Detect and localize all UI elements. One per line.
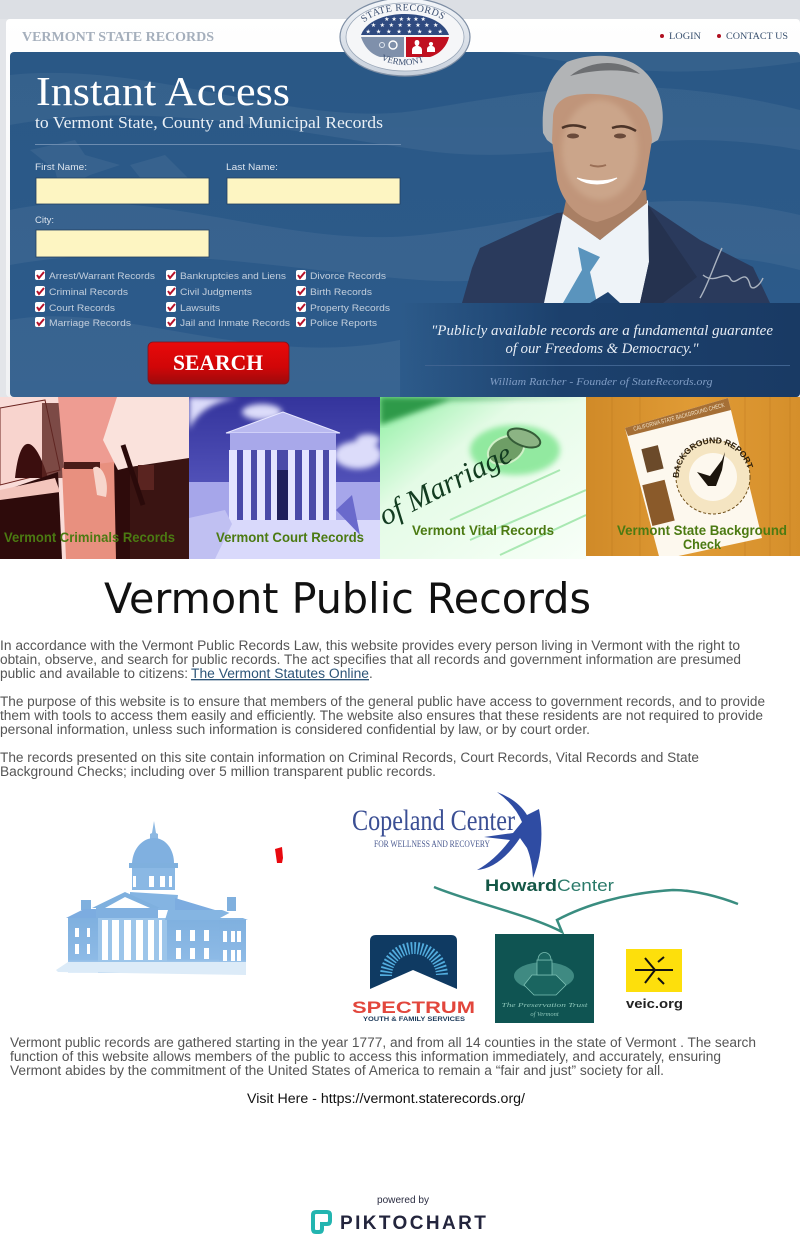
record type checkboxes: Divorce Records — [310, 271, 386, 282]
site name: VERMONT STATE RECORDS — [22, 29, 214, 44]
records paragraph: The records presented on this site contain information on Criminal Records, Court Records, Vital Records and State — [0, 750, 699, 765]
heading: Instant Access: Instant Access — [36, 68, 290, 114]
photo: background check: CALIFORNIA STATE BACKGROUND CHECK — [633, 403, 725, 433]
header links: CONTACT US — [726, 32, 788, 42]
intro paragraph: public and available to citizens: — [0, 666, 188, 681]
state records seal: ★ ★ ★ ★ ★ ★ ★ ★ — [371, 22, 439, 29]
photo: vital records — [373, 397, 586, 559]
face — [552, 94, 652, 222]
header links: LOGIN — [669, 32, 701, 42]
shirt — [544, 200, 649, 303]
state records seal: STATE RECORDS — [361, 4, 445, 22]
intro paragraph: The Vermont Statutes Online — [191, 666, 369, 681]
logo: Spectrum — [352, 935, 475, 1023]
logo: Preservation Trust — [495, 934, 594, 1023]
quote panel — [400, 292, 800, 397]
logo: VEIC — [626, 949, 683, 1011]
record type checkboxes: Marriage Records — [49, 318, 131, 329]
records paragraph — [0, 750, 699, 779]
search form fields: First Name: — [35, 162, 87, 173]
title: Vermont Public Records — [104, 574, 591, 623]
logo: Howard Center: Center — [557, 876, 614, 895]
closing paragraph — [10, 1035, 756, 1078]
intro paragraph: obtain, observe, and search for public records. The act specifies that all records and government information are presumed — [0, 652, 741, 667]
heading: Instant Access: to Vermont State, County and Municipal Records — [35, 113, 383, 132]
record type checkboxes: Bankruptcies and Liens — [180, 271, 286, 282]
photo: background check: BACKGROUND REPORT — [672, 437, 754, 478]
records paragraph: Background Checks; including over 5 million transparent public records. — [0, 764, 436, 779]
logo: Preservation Trust: of Vermont — [530, 1011, 559, 1018]
icon: capitol building — [56, 821, 248, 975]
intro paragraph: . — [369, 666, 373, 681]
purpose paragraph: personal information, unless such information is considered confidential by law, or by court order. — [0, 722, 590, 737]
Piktochart footer: PIKTOCHART — [340, 1213, 488, 1234]
logo: Spectrum: YOUTH & FAMILY SERVICES — [363, 1016, 466, 1023]
logo: Howard Center: Howard — [485, 876, 557, 895]
search button — [148, 342, 289, 384]
closing paragraph: Vermont abides by the commitment of the United States of America to remain a “fair and just” society for all. — [10, 1063, 664, 1078]
portrait of founder — [462, 56, 770, 303]
search button: SEARCH — [173, 350, 263, 375]
closing paragraph: function of this website allows members of the public to access this information immediately, and accurately, ensuring — [10, 1049, 721, 1064]
record type checkboxes: Birth Records — [310, 287, 372, 298]
intro paragraph: In accordance with the Vermont Public Records Law, this website provides every person living in Vermont with the right to — [0, 638, 740, 653]
hero panel — [10, 52, 800, 397]
purpose paragraph: The purpose of this website is to ensure that members of the general public have access to government records, and to provide — [0, 694, 765, 709]
record type checkboxes: Civil Judgments — [180, 287, 252, 298]
record type checkboxes: Police Reports — [310, 318, 377, 329]
photo: background check: Check — [683, 536, 721, 552]
quote panel: "Publicly available records are a fundamental guarantee — [431, 323, 774, 339]
logo: Preservation Trust: The Preservation Trust — [502, 1002, 588, 1009]
label: Vermont State Background — [617, 522, 787, 538]
photo: court records — [189, 397, 382, 559]
record type checkboxes: Arrest/Warrant Records — [49, 271, 155, 282]
search form fields — [35, 162, 400, 257]
record type checkboxes: Jail and Inmate Records — [180, 318, 290, 329]
closing paragraph: Vermont public records are gathered starting in the year 1777, and from all 14 counties in the state of Vermont . The search — [10, 1035, 756, 1050]
Piktochart footer: powered by — [377, 1195, 429, 1206]
right lapel — [640, 205, 697, 303]
record type checkboxes: Lawsuits — [180, 303, 220, 314]
Piktochart footer — [313, 1195, 488, 1234]
logo: Copeland Center: Copeland Center — [352, 804, 515, 837]
state records seal — [339, 0, 471, 77]
header links — [660, 32, 788, 42]
purpose paragraph — [0, 694, 765, 737]
search form fields: Last Name: — [226, 162, 278, 173]
logo: Copeland Center: FOR WELLNESS AND RECOVERY — [374, 839, 490, 849]
record type checkboxes: Criminal Records — [49, 287, 128, 298]
logo: VEIC: veic.org — [626, 996, 683, 1011]
record type checkboxes: Court Records — [49, 303, 115, 314]
label: Vermont Court Records — [216, 529, 364, 545]
flag wave background — [10, 52, 800, 397]
visit link: Visit Here - https://vermont.staterecords.org/ — [247, 1091, 525, 1106]
record type checkboxes — [35, 270, 390, 329]
quote panel: of our Freedoms & Democracy." — [506, 341, 699, 357]
search form fields: City: — [35, 215, 54, 226]
eyes, nose and mouth — [562, 125, 586, 128]
record type checkboxes: Property Records — [310, 303, 390, 314]
state records seal: ★ ★ ★ ★ ★ ★ — [384, 16, 426, 23]
label: Vermont Vital Records — [412, 522, 554, 538]
logo: Spectrum: SPECTRUM — [352, 998, 475, 1017]
logo: Howard Center — [434, 876, 738, 932]
page header band — [0, 0, 800, 397]
purpose paragraph: them with tools to access them easily and efficiently. The website also ensures that these residents are not required to provide — [0, 708, 763, 723]
photo: background check — [586, 397, 800, 556]
photo: criminal records — [0, 397, 189, 559]
hair — [543, 56, 663, 150]
tie — [563, 247, 600, 303]
intro paragraph — [0, 638, 741, 681]
logo: Copeland Center — [352, 792, 541, 878]
photo: vital records: of Marriage — [373, 437, 517, 532]
signature — [700, 248, 763, 298]
label: Vermont Criminals Records — [4, 529, 175, 545]
state records seal: VERMONT — [383, 54, 423, 66]
quote panel: William Ratcher - Founder of StateRecords.org — [490, 377, 712, 388]
suit — [462, 205, 770, 303]
state records seal: ★ ★ ★ ★ ★ ★ ★ ★ — [366, 28, 444, 36]
icon: Vermont state map — [275, 847, 283, 863]
heading: Instant Access — [35, 78, 401, 145]
neck — [563, 190, 647, 240]
